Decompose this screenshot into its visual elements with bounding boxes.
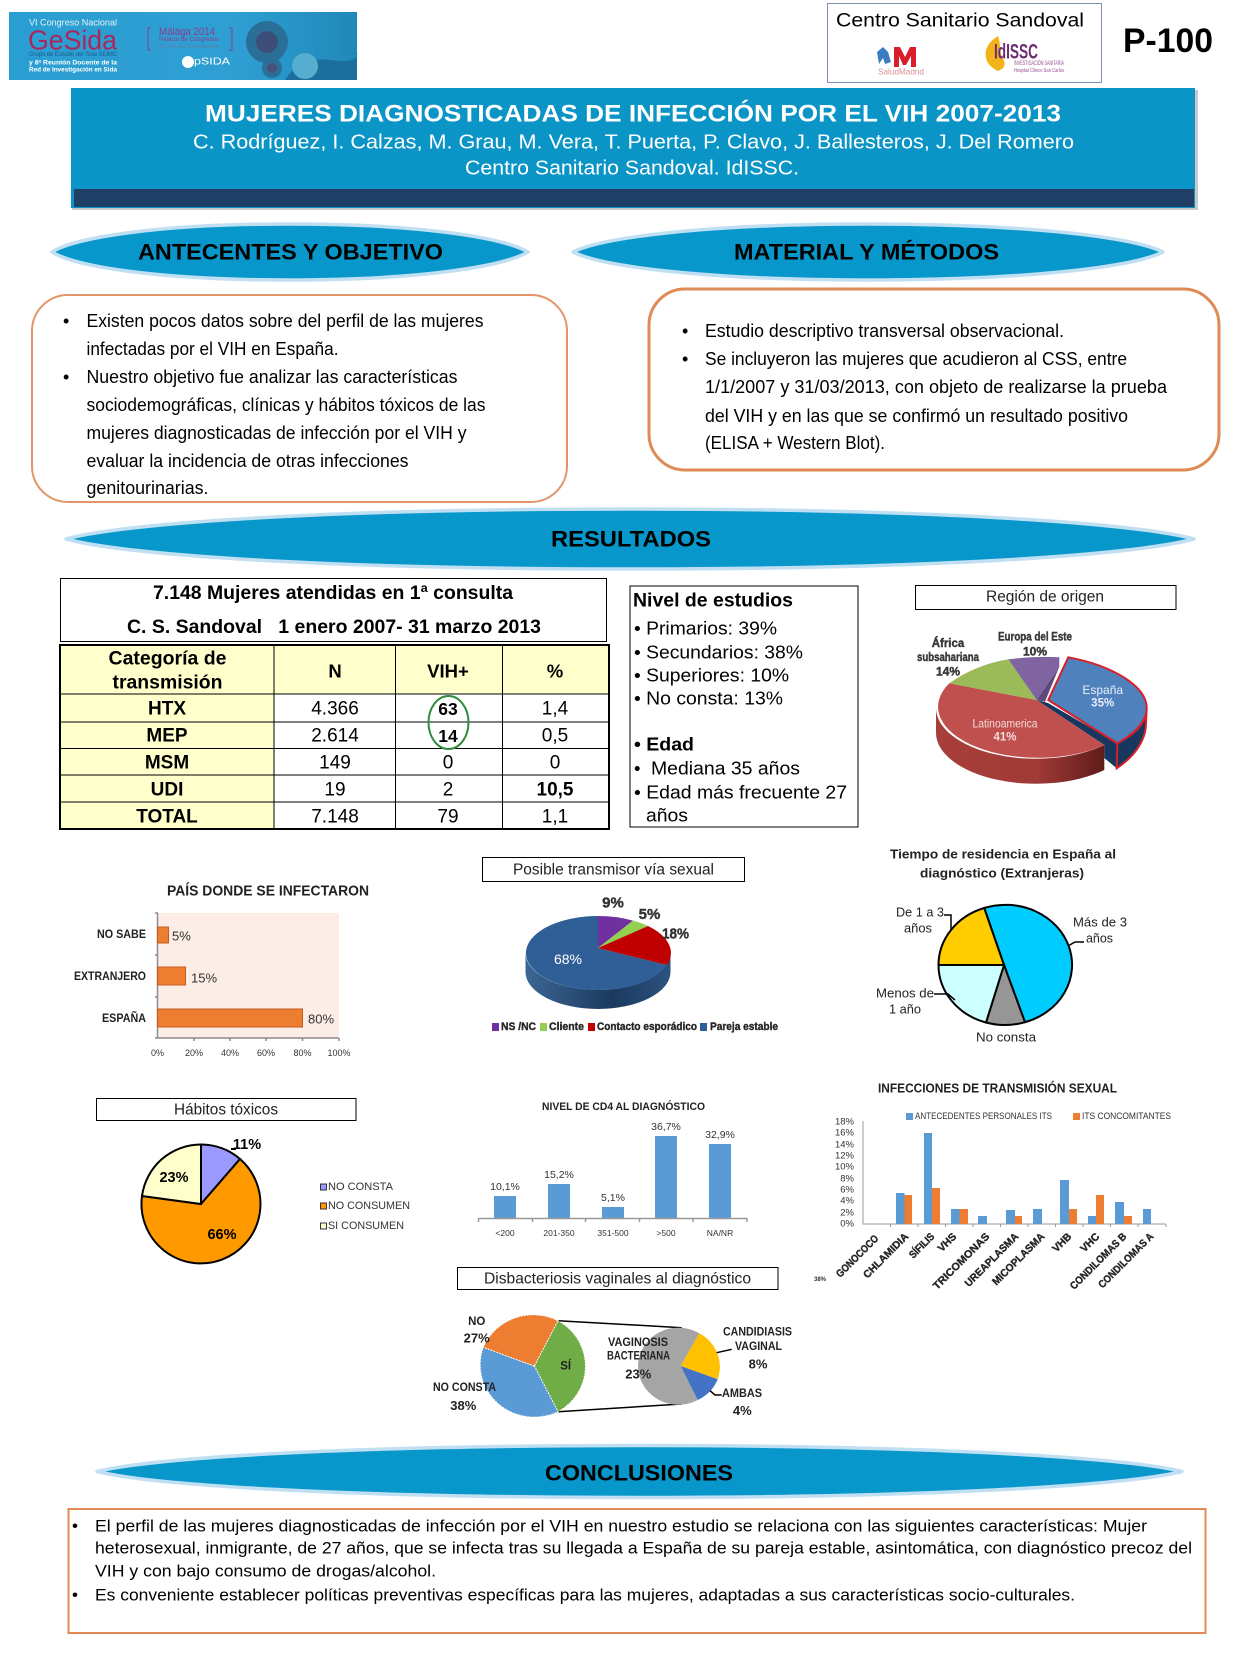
x axis ticks: 100% [327,1048,351,1058]
panel: antecedentes text: sociodemográficas, clínicas y hábitos tóxicos de las [86,395,486,415]
panel: nivel de estudios y edad: • No consta: 13% [634,688,783,708]
bar labels: 15% [191,970,217,986]
bar labels [74,928,334,1026]
legend [492,1021,778,1033]
chart: disbacteriosis vaginales [433,1268,792,1418]
category labels [834,1230,1157,1292]
panel: antecedentes text: mujeres diagnosticadas de infección por el VIH y [86,423,466,443]
stray label: 38% [814,1277,827,1283]
icon: IdISSC logo: INVESTIGACIÓN SANITARIA [1014,60,1064,67]
table: transmission categories: 0 [550,752,560,774]
y axis labels [835,1116,855,1230]
panel: material y métodos text: Estudio descriptivo transversal observacional. [705,321,1064,341]
chart: región de origen [916,586,1176,784]
x axis ticks: 20% [185,1048,203,1058]
value labels: 32,9% [705,1129,735,1141]
logo: GeSida congress banner: 12-14 de Noviembre [159,44,219,50]
pie labels: Latinoamerica [972,716,1038,730]
bars: concomitantes [904,1188,1132,1224]
chart title box [916,586,1176,610]
table: transmission categories: Categoría de [108,648,226,670]
table: transmission categories: TOTAL [136,806,198,828]
pie labels: 66% [207,1227,237,1243]
panel: antecedentes text: • [63,367,69,387]
chart: posible transmisor vía sexual [482,858,778,1033]
panel: material y métodos text: Se incluyeron las mujeres que acudieron al CSS, entre [705,349,1127,369]
bars [494,1136,731,1218]
y axis labels: 4% [840,1196,855,1206]
table: transmission categories: 7.148 [311,806,359,828]
legend [906,1111,1171,1121]
pie labels [917,632,1123,744]
panel: nivel de estudios y edad: • Secundarios: 38% [634,642,803,662]
chart: país donde se infectaron [74,882,369,1058]
category labels: NA/NR [707,1228,733,1238]
leader lines [934,915,1084,1000]
pie labels: años [904,920,932,936]
pie labels: NO [468,1316,485,1328]
category labels: <200 [495,1228,515,1238]
pie labels: 9% [602,894,624,912]
icon: IdISSC logo [986,36,1064,74]
panel: nivel de estudios y edad: Mediana 35 años [651,758,800,778]
chart title: NIVEL DE CD4 AL DIAGNÓSTICO [542,1100,705,1113]
table: transmission categories: 0 [443,752,453,774]
icon: Salud Madrid logo [877,47,924,76]
breakdown pie [638,1328,720,1405]
chart title: diagnóstico (Extranjeras) [920,866,1084,880]
x axis ticks: 60% [257,1048,275,1058]
table: transmission categories: % [547,660,563,682]
icon: IdISSC logo: Hospital Clínico San Carlos [1014,68,1064,74]
pie labels: De 1 a 3 [896,904,944,920]
panel: nivel de estudios y edad: • Edad [634,734,694,754]
category labels: SÍFILIS [906,1230,937,1261]
pie labels: VAGINAL [735,1341,782,1353]
panel: conclusiones text: Es conveniente establecer políticas preventivas específicas para las mujeres, adaptadas a sus características socio-culturales. [95,1586,1075,1604]
table: transmission categories: 2 [443,780,453,800]
y axis labels: 6% [840,1184,855,1196]
table: transmission categories: 2.614 [311,726,359,746]
heading: Resultados [66,509,1194,569]
heading: Conclusiones: CONCLUSIONES [545,1460,733,1486]
table: transmission categories: 10,5 [537,780,574,800]
category labels [495,1228,733,1238]
y axis labels: 14% [835,1140,855,1150]
panel: nivel de estudios y edad: • Superiores: 10% [634,664,789,686]
panel: table heading: C. S. Sandoval 1 enero 2007- 31 marzo 2013 [127,616,541,638]
pie slices [526,916,671,1009]
logo: GeSida congress banner: Málaga 2014 [159,26,215,38]
category labels: CONDILOMAS B [1068,1230,1130,1292]
value labels: 10,1% [490,1181,520,1193]
category labels: 351-500 [597,1228,629,1238]
table: transmission categories: HTX [148,698,186,720]
panel: antecedentes text: infectadas por el VIH en España. [86,339,338,359]
pie labels: CANDIDIASIS [723,1327,792,1339]
pie labels [554,894,689,967]
category labels: VHC [1078,1230,1103,1255]
legend [320,1181,410,1232]
chart title: PAÍS DONDE SE INFECTARON [167,882,369,900]
heading: Material y métodos [573,224,1163,280]
y axis labels: 18% [835,1116,855,1128]
table: transmission categories: 63 [438,699,458,719]
pie labels: subsahariana [917,652,979,664]
heading: Resultados: RESULTADOS [551,526,711,552]
bar labels: NO SABE [97,929,146,941]
table: transmission categories: 0,5 [542,726,568,746]
panel: nivel de estudios y edad [630,586,858,827]
panel: antecedentes text: Existen pocos datos sobre del perfil de las mujeres [86,311,484,331]
panel: conclusiones text: El perfil de las mujeres diagnosticadas de infección por el VIH en nuestro estudio se relaciona con las siguientes características: Mujer [95,1516,1147,1536]
highlight ellipse: HTX and MEP [428,696,468,749]
value labels: 5,1% [601,1192,625,1204]
x axis ticks [151,1048,351,1058]
value labels: 15,2% [544,1169,574,1181]
y axis labels: 16% [835,1128,855,1138]
pie labels: 38% [450,1398,477,1413]
panel: nivel de estudios y edad: • Primarios: 39% [634,618,777,638]
chart title box [482,858,744,882]
pie labels [433,1316,792,1418]
pie slices [141,1144,260,1263]
table: transmission categories: 1,4 [542,698,569,720]
chart title box: Disbacteriosis vaginales al diagnóstico [484,1270,751,1288]
pie labels: No consta [976,1030,1037,1044]
category labels: UREAPLASMA [963,1230,1022,1289]
authors: C. Rodríguez, I. Calzas, M. Grau, M. Vera, T. Puerta, P. Clavo, J. Ballesteros, J. Del Romero [193,130,1074,154]
table: transmission categories: 79 [437,806,459,828]
pie labels: 68% [554,951,582,967]
chart: nivel de CD4 [478,1100,747,1238]
category labels: VHS [935,1231,959,1255]
pie labels: 27% [464,1330,490,1346]
pie labels: 8% [749,1356,768,1372]
pie labels: 35% [1091,698,1114,710]
x axis ticks: 40% [221,1048,239,1058]
table: transmission categories: 1,1 [542,806,568,828]
category labels: >500 [656,1228,676,1238]
panel: material y métodos text: • [682,349,688,369]
panel: table heading: 7.148 Mujeres atendidas en 1ª consulta [153,582,513,604]
legend: NO CONSUMEN [328,1200,410,1212]
legend: NS /NC [501,1021,536,1033]
category labels: CHLAMIDIA [861,1230,912,1281]
logo: GeSida congress banner: y 8ª Reunión Docente de la [29,60,117,66]
y axis labels: 8% [840,1174,855,1184]
x axis ticks: 80% [293,1048,312,1058]
panel: nivel de estudios y edad: • [634,758,640,778]
logo: GeSida congress banner: Red de Investigación en Sida [29,66,117,74]
panel: table heading [60,578,606,642]
pie labels: Europa del Este [998,632,1072,644]
panel: conclusiones text: • [72,1516,78,1536]
bar labels: 5% [172,928,191,944]
bar labels: ESPAÑA [102,1012,146,1025]
panel: material y métodos text: del VIH y en las que se confirmó un resultado positivo [705,406,1128,426]
logos box: Centro Sanitario Sandoval [828,4,1102,82]
chart: infecciones de transmisión sexual [814,1080,1171,1292]
table: transmission categories: N [328,660,342,682]
logo: GeSida congress banner: VI Congreso Nacional [29,18,117,28]
pie labels: 10% [1023,644,1047,658]
table: transmission categories: MEP [146,726,188,746]
category labels: CONDILOMAS A [1096,1230,1157,1291]
category labels: TRICOMONAS [931,1231,992,1292]
pie labels: 23% [625,1366,652,1382]
legend: ITS CONCOMITANTES [1082,1111,1171,1121]
logos box: Centro Sanitario Sandoval: Centro Sanitario Sandoval [836,10,1084,32]
panel: conclusiones text: VIH y con bajo consumo de drogas/alcohol. [95,1562,436,1580]
table: transmission categories: 19 [324,780,346,800]
panel: nivel de estudios y edad: • Edad más frecuente 27 [634,782,847,802]
panel: conclusiones text: heterosexual, inmigrante, de 27 años, que se infecta tras su llegada a España de su pareja estable, asintomática, con diagnóstico precoz del [95,1538,1192,1558]
table: transmission categories [60,645,609,829]
main pie [480,1315,585,1417]
table: transmission categories: MSM [145,752,189,774]
pie labels: 18% [662,926,689,942]
pie labels: SÍ [560,1360,572,1373]
panel: material y métodos text: • [682,321,688,341]
category labels: GONOCOCO [834,1233,881,1280]
value labels [490,1121,735,1204]
pie labels: años [1086,930,1113,946]
pie labels: Más de 3 [1073,914,1127,930]
chart title box: Hábitos tóxicos [174,1102,278,1118]
category labels: 201-350 [543,1228,575,1238]
panel: conclusiones text [68,1509,1206,1633]
panel: material y métodos text: 1/1/2007 y 31/03/2013, con objeto de realizarse la prueba [705,377,1168,397]
legend: Pareja estable [710,1021,778,1033]
title: MUJERES DIAGNOSTICADAS DE INFECCIÓN POR EL VIH 2007-2013 [205,100,1061,128]
chart title box [96,1098,356,1120]
y axis labels: 2% [840,1208,855,1218]
pie labels: AMBAS [722,1388,762,1400]
panel: nivel de estudios y edad: Nivel de estudios [633,590,793,612]
x axis ticks: 0% [151,1048,164,1058]
poster number: P-100 [1123,22,1213,60]
chart title box: Posible transmisor vía sexual [513,862,714,878]
panel: material y métodos text [649,289,1219,470]
heading: Material y métodos: MATERIAL Y MÉTODOS [734,240,999,264]
y axis labels: 0% [840,1218,855,1230]
pie labels: África [932,637,965,650]
legend: ANTECEDENTES PERSONALES ITS [915,1111,1052,1121]
logo: GeSida congress banner [9,12,357,80]
pie labels: 14% [936,664,960,678]
panel: antecedentes text: genitourinarias. [86,478,208,498]
heading: Antecedentes y objetivo: ANTECENTES Y OBJETIVO [138,240,443,264]
logo: GeSida congress banner: pSIDA [194,56,230,68]
table: transmission categories: 149 [319,752,351,774]
pie labels [159,1137,261,1243]
leader lines [710,1349,732,1395]
title banner [71,88,1198,210]
pie labels: 23% [159,1170,189,1186]
table: transmission categories: VIH+ [427,660,469,682]
panel: antecedentes text: evaluar la incidencia de otras infecciones [86,451,408,471]
chart title: INFECCIONES DE TRANSMISIÓN SEXUAL [878,1080,1117,1096]
legend: SI CONSUMEN [328,1220,404,1232]
heading: Antecedentes y objetivo [52,224,528,280]
legend: Contacto esporádico [597,1021,697,1033]
pie slices [936,657,1147,784]
heading: Conclusiones [97,1446,1182,1498]
chart title box [458,1268,778,1290]
chart title: Tiempo de residencia en España al [890,846,1116,862]
pie labels: 1 año [889,1002,921,1016]
chart title box: Región de origen [986,588,1104,606]
pie slices [938,905,1072,1025]
chart: hábitos tóxicos [96,1098,410,1263]
table: transmission categories: 14 [438,726,458,746]
pie labels: NO CONSTA [433,1382,496,1394]
panel: conclusiones text: • [72,1586,78,1604]
table: transmission categories: UDI [151,780,183,800]
panel: antecedentes text [32,295,567,502]
connector lines [558,1321,682,1412]
table: transmission categories: 4.366 [311,698,359,720]
bar labels: EXTRANJERO [74,971,146,983]
logo: GeSida congress banner: Palacio de Congresos [159,37,219,43]
pie labels: 41% [993,732,1017,744]
table: transmission categories: transmisión [112,672,222,694]
pie labels: 5% [639,906,660,923]
pie labels: España [1082,683,1123,697]
value labels: 36,7% [651,1121,681,1133]
chart: tiempo de residencia [876,846,1127,1044]
pie labels: 11% [233,1137,261,1153]
y axis labels: 12% [835,1150,855,1162]
y axis labels: 10% [835,1162,855,1172]
legend: NO CONSTA [328,1181,394,1193]
pie labels: Menos de [876,986,934,1000]
legend: Cliente [549,1021,584,1033]
logo: GeSida congress banner: Grupo de Estudio del Sida SEIMC [29,52,118,58]
pie labels [876,904,1127,1044]
panel: material y métodos text: (ELISA + Western Blot). [705,433,885,453]
bar labels: 80% [308,1012,334,1026]
pie labels: VAGINOSIS [608,1337,668,1349]
panel: antecedentes text: Nuestro objetivo fue analizar las características [86,367,458,387]
category labels: VHB [1050,1230,1075,1255]
panel: nivel de estudios y edad: años [646,804,688,826]
bars [158,927,302,1027]
bars: antecedentes [896,1133,1151,1224]
category labels: MICOPLASMA [990,1230,1048,1288]
chart title [890,846,1116,880]
logo: GeSida congress banner: GeSida [28,24,117,56]
pie labels: BACTERIANA [607,1351,670,1363]
affiliation: Centro Sanitario Sandoval. IdISSC. [465,156,799,180]
pie labels: 4% [733,1403,752,1418]
icon: IdISSC logo: IdISSC [994,40,1038,64]
icon: Salud Madrid logo: SaludMadrid [878,68,924,76]
panel: antecedentes text: • [63,311,69,331]
